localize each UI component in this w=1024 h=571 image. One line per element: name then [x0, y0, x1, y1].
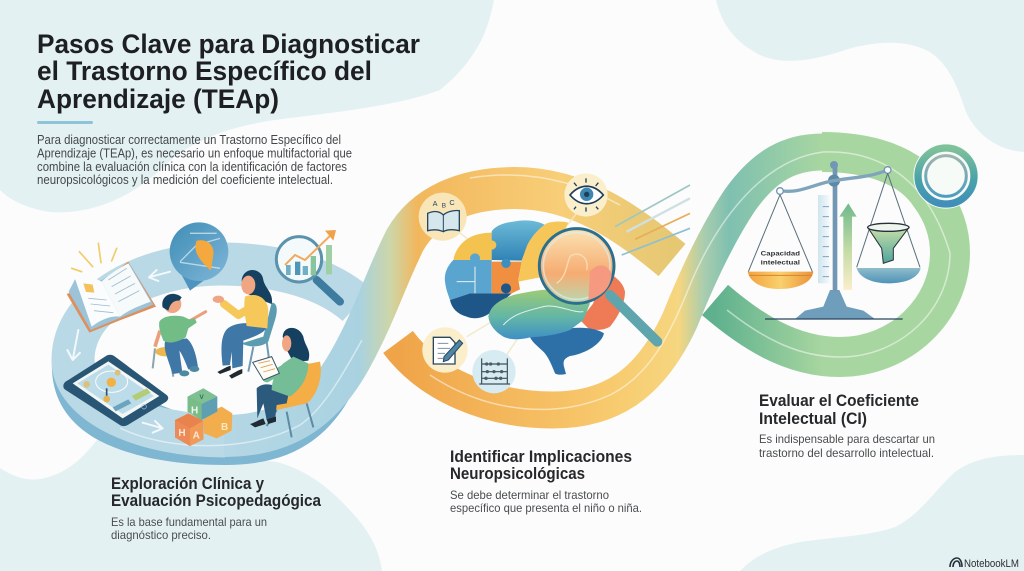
- icon: alphabet blocks: A: [193, 431, 200, 442]
- icon: document and pencil: [422, 327, 468, 373]
- ribbon: platform rim: [52, 360, 362, 465]
- title: Aprendizaje (TEAp): [37, 84, 279, 114]
- step 3 text: trastorno del desarrollo intelectual.: [759, 446, 934, 460]
- step 2 text: Neuropsicológicas: [450, 465, 585, 483]
- left pan: capacidad intelectual: Capacidad: [761, 251, 800, 258]
- step 3 text: Es indispensable para descartar un: [759, 432, 935, 446]
- step 2 text: [450, 448, 642, 515]
- icon: alphabet blocks: H: [178, 428, 186, 439]
- intro paragraph: [37, 132, 352, 187]
- icon: ABC book: A: [433, 199, 438, 208]
- illustration: brain: [419, 173, 690, 393]
- icon: tablet: [63, 355, 168, 426]
- intro paragraph: Aprendizaje (TEAp), es necesario un enfoque multifactorial que: [37, 146, 352, 160]
- step 2 text: Se debe determinar el trastorno: [450, 488, 609, 502]
- illustration: balance scale: [748, 143, 979, 319]
- step 1 text: diagnóstico preciso.: [111, 528, 211, 542]
- ribbon: yellow to green: [398, 152, 823, 410]
- figure: child: [153, 294, 206, 377]
- step 2 text: Identificar Implicaciones: [450, 448, 632, 466]
- icon: alphabet blocks: [175, 388, 232, 446]
- connector lines: [458, 213, 577, 355]
- figure: seated woman with clipboard: [250, 328, 321, 437]
- ring endpoint: [913, 143, 979, 209]
- title: [37, 29, 420, 114]
- icon: ABC book: C: [449, 198, 455, 207]
- icon: eye: [564, 173, 608, 217]
- icon: alphabet blocks: V: [199, 394, 204, 401]
- ruler: [818, 195, 829, 283]
- intro paragraph: Para diagnosticar correctamente un Trastorno Específico del: [37, 132, 341, 147]
- background blob: top right: [716, 0, 1024, 152]
- icon: abacus: [472, 350, 516, 393]
- icon: open book: [67, 243, 156, 333]
- illustration: clinical scene: [63, 222, 340, 446]
- ribbon: blue ring: [73, 264, 357, 436]
- scale base and column: [765, 161, 903, 319]
- title: el Trastorno Específico del: [37, 56, 372, 86]
- background blob: bottom left: [0, 440, 382, 571]
- icon: magnifier with chart: [276, 230, 340, 302]
- title: Pasos Clave para Diagnosticar: [37, 29, 420, 59]
- intro paragraph: combine la evaluación clínica con la identificación de factores: [37, 159, 347, 174]
- title underline: [37, 121, 93, 124]
- step 2 text: específico que presenta el niño o niña.: [450, 501, 642, 515]
- icon: alphabet blocks: H: [191, 405, 198, 416]
- brain: [445, 220, 625, 375]
- intro paragraph: neuropsicológicos y la medición del coeficiente intelectual.: [37, 172, 333, 187]
- left pan: capacidad intelectual: intelectual: [761, 260, 800, 267]
- step 3 text: [759, 392, 935, 460]
- step 3 text: Evaluar el Coeficiente: [759, 392, 919, 410]
- step 3 text: Intelectual (CI): [759, 410, 867, 428]
- rays: [615, 185, 690, 255]
- icon: alphabet blocks: B: [221, 422, 228, 433]
- step 1 text: Exploración Clínica y: [111, 475, 265, 493]
- icon: speech bubble: [170, 222, 228, 291]
- arrows on ring: [67, 270, 170, 433]
- icon: ABC book: B: [442, 203, 447, 210]
- background blob: top left: [0, 0, 494, 212]
- right pan: funnel: [857, 173, 921, 283]
- left pan: capacidad intelectual: [748, 195, 813, 289]
- figure: seated woman in yellow: [213, 270, 277, 379]
- step 1 text: Evaluación Psicopedagógica: [111, 492, 322, 510]
- ribbon: blue to yellow: [224, 188, 672, 436]
- icon: ABC book: [419, 193, 467, 241]
- growth arrow: [839, 203, 857, 290]
- ribbon: green loop: [715, 152, 950, 357]
- background blob: bottom right: [740, 455, 1024, 571]
- magnifying glass: [539, 229, 657, 342]
- step 1 text: Es la base fundamental para un: [111, 515, 267, 529]
- ribbon highlights: [120, 152, 950, 446]
- step 1 text: [111, 475, 322, 542]
